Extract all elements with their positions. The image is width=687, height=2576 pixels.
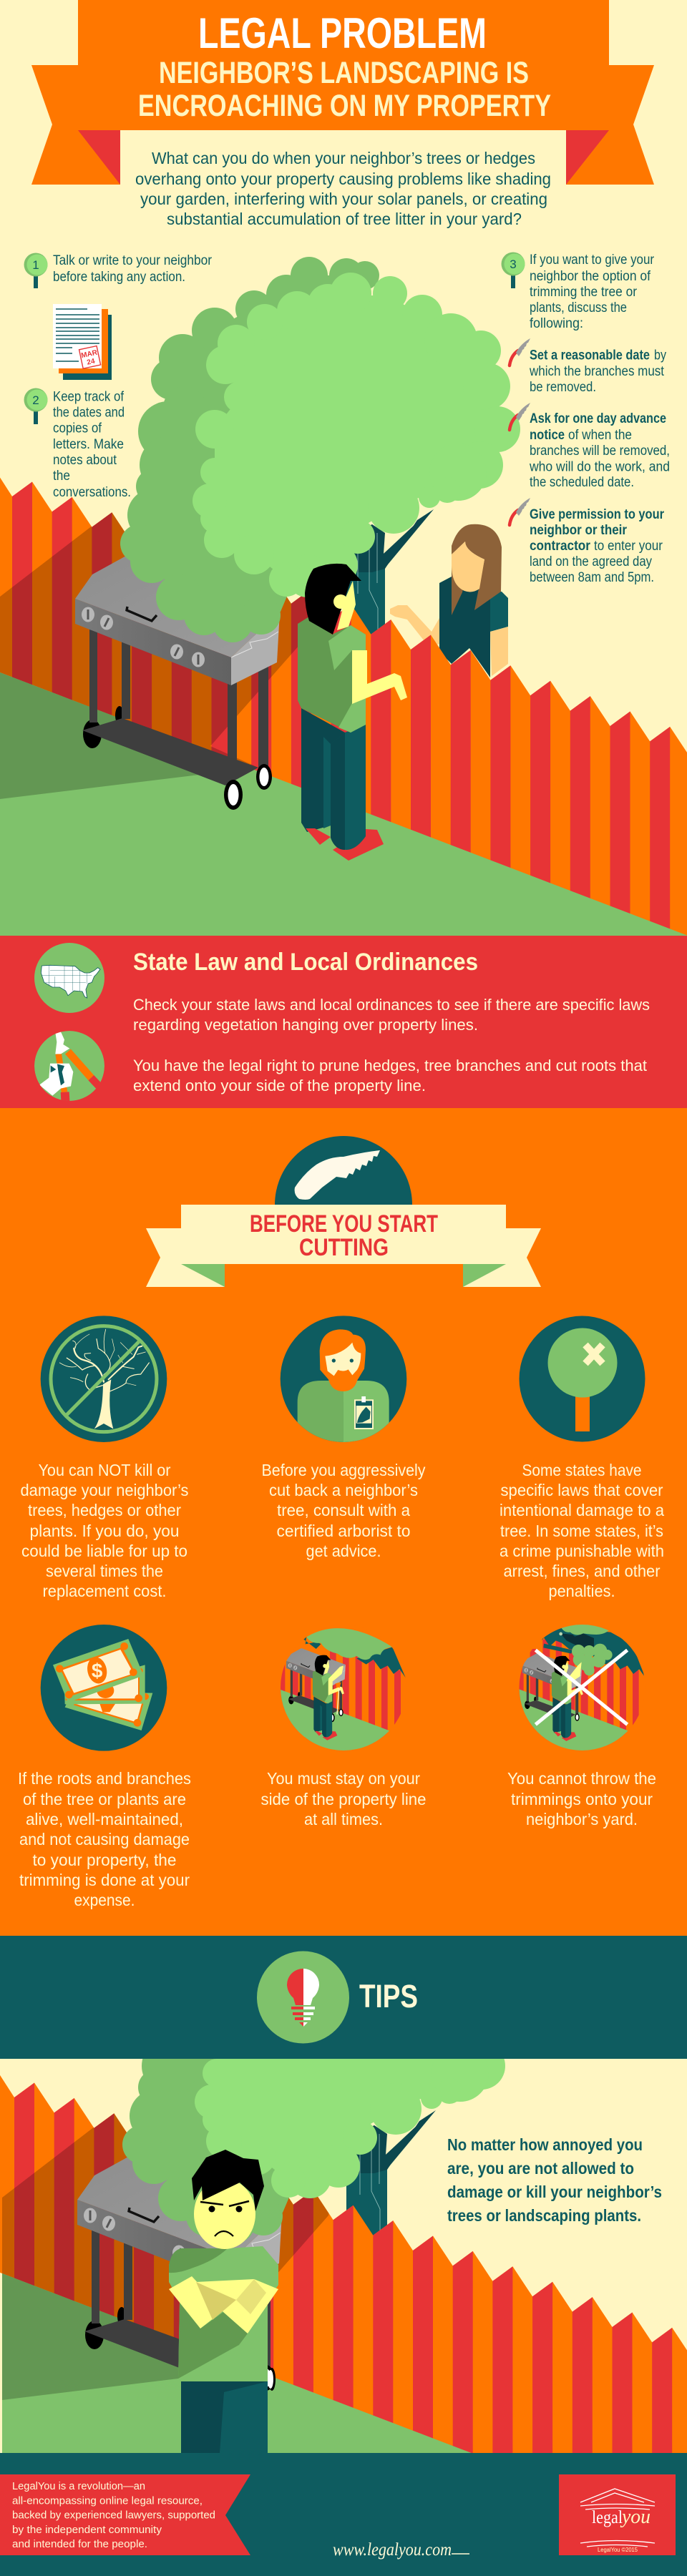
heading ribbon: before you start cutting — [146, 1205, 541, 1287]
text: state laws: a crime punishable with — [500, 1542, 664, 1560]
step 3: neighbor the option of — [530, 269, 651, 284]
logo — [559, 2474, 676, 2555]
text: roots and branches — [18, 1769, 191, 1909]
barbecue grill — [75, 555, 280, 810]
heading: tips: TIPS — [359, 1978, 418, 2014]
step 2: notes about — [53, 453, 117, 468]
logo: you — [620, 2506, 651, 2528]
text: state laws: specific laws that cover — [501, 1481, 663, 1499]
state law body text: extend onto your side of the property line. — [133, 1077, 426, 1094]
text: consult an arborist: Before you aggressively — [262, 1461, 426, 1479]
text: consult an arborist: get advice. — [306, 1542, 381, 1560]
tip text: No matter how annoyed you — [447, 2135, 643, 2154]
tip: one day advance notice: notice — [530, 428, 565, 443]
text: do not throw trimmings: You cannot throw the — [507, 1769, 656, 1788]
step 2: the dates and — [53, 405, 125, 421]
icon: money bills — [41, 1625, 167, 1751]
text: state laws: intentional damage to a — [500, 1501, 664, 1519]
illustration: neighbors at the fence — [0, 257, 687, 937]
text: state laws — [500, 1461, 664, 1600]
state law body text: You have the legal right to prune hedges, tree branches and cut roots that — [133, 1057, 647, 1074]
about flag: and intended for the people. — [12, 2538, 147, 2550]
tip: one day advance notice: the scheduled date. — [530, 475, 634, 490]
overhanging tree — [120, 257, 520, 642]
intro text: your garden, interfering with your solar panels, or creating — [140, 190, 547, 208]
text: consult an arborist: certified arborist to — [276, 1522, 411, 1540]
tip: set a reasonable date: be removed. — [530, 380, 596, 395]
tip text — [447, 2135, 662, 2225]
step 1: before taking any action. — [53, 270, 185, 285]
tip: give permission: land on the agreed day — [530, 554, 652, 569]
text: stay on your side — [260, 1769, 427, 1828]
step 2: the — [53, 469, 70, 484]
tip: one day advance notice: Ask for one day advance — [530, 411, 666, 426]
scene: trunk, fence, lawn, grill and tree — [0, 2059, 687, 2453]
about flag — [0, 2474, 250, 2555]
step 2: Keep track of — [53, 389, 125, 405]
intro text: substantial accumulation of tree litter in your yard? — [167, 210, 522, 228]
text: roots and branches: expense. — [74, 1891, 135, 1909]
state law body text: regarding vegetation hanging over property lines. — [133, 1016, 478, 1034]
panel: tips header — [0, 1936, 687, 2059]
step 1: Talk or write to your neighbor — [53, 253, 213, 268]
tip: one day advance notice: branches will be removed, — [530, 444, 670, 459]
tip: set a reasonable date — [510, 338, 666, 395]
step 2: conversations. — [53, 485, 131, 500]
text: state laws: penalties. — [548, 1582, 615, 1600]
step 1: 1 — [32, 258, 39, 272]
text: state laws: Some states have — [522, 1461, 641, 1479]
tip: give permission: between 8am and 5pm. — [530, 570, 654, 585]
logo: LegalYou ©2015 — [598, 2547, 638, 2553]
subtitle — [138, 56, 551, 123]
icon: US map — [34, 943, 104, 1013]
icon: letters with date stamp: 24 — [86, 358, 96, 367]
step 1 — [24, 253, 213, 288]
text: state laws: tree. In some states, it’s — [500, 1522, 663, 1540]
text: you can not kill: several times the — [46, 1562, 163, 1580]
panel: before you start cutting — [0, 1108, 687, 1936]
text: consult an arborist — [262, 1461, 426, 1560]
icon: man trimming on his side — [281, 1628, 405, 1750]
text: consult an arborist: tree, consult with a — [277, 1501, 410, 1519]
tip: give permission — [510, 498, 665, 585]
icon: money bills: $ — [92, 1660, 103, 1682]
about flag: LegalYou is a revolution—an — [12, 2480, 145, 2492]
text: stay on your side: at all times. — [304, 1810, 383, 1828]
title banner — [31, 0, 654, 185]
text: do not throw trimmings — [507, 1769, 656, 1828]
panel: state law and local ordinances — [0, 936, 687, 1108]
annoyed man — [169, 2150, 278, 2453]
tip: set a reasonable date: which the branches must — [529, 364, 665, 379]
heading ribbon: before you start cutting: CUTTING — [299, 1234, 389, 1261]
fence — [0, 466, 687, 937]
text: you can not kill: damage your neighbor’s — [20, 1481, 189, 1499]
text: you can not kill: trees, hedges or other — [28, 1501, 181, 1519]
step 2: 2 — [32, 393, 39, 407]
logo: legal — [592, 2508, 623, 2527]
tip: set a reasonable date: Set a reasonable date — [530, 348, 650, 363]
man — [298, 564, 407, 861]
lawn and tree shadow — [0, 492, 687, 937]
tip: give permission: contractor — [530, 539, 591, 554]
tip: one day advance notice — [510, 403, 670, 490]
text: roots and branches: of the tree or plants are — [23, 1790, 186, 1808]
step 2: letters. Make — [53, 437, 124, 452]
step 3: plants, discuss the — [530, 300, 627, 315]
intro text — [135, 149, 551, 228]
intro text: What can you do when your neighbor’s trees or hedges — [152, 149, 535, 167]
tip text: trees or landscaping plants. — [447, 2206, 641, 2225]
text: do not throw trimmings: trimmings onto your — [511, 1790, 653, 1808]
text: roots and branches: and not causing damage — [19, 1830, 190, 1848]
text: you can not kill: plants. If you do, you — [30, 1522, 179, 1540]
neighbor woman — [390, 524, 508, 677]
text: you can not kill: replacement cost. — [43, 1582, 166, 1600]
step 3: If you want to give your — [530, 253, 655, 268]
icon: pruning saw — [275, 1136, 412, 1205]
subtitle: ENCROACHING ON MY PROPERTY — [138, 89, 551, 123]
heading ribbon: before you start cutting: BEFORE YOU START — [250, 1210, 438, 1238]
text: stay on your side: You must stay on your — [267, 1769, 420, 1788]
icon: do not throw trimmings — [520, 1625, 644, 1750]
subtitle: NEIGHBOR’S LANDSCAPING IS — [159, 56, 529, 90]
text: state laws: arrest, fines, and other — [504, 1562, 661, 1580]
text: roots and branches: trimming is done at your — [19, 1871, 190, 1889]
about flag: backed by experienced lawyers, supported — [12, 2509, 215, 2522]
text: do not throw trimmings: neighbor’s yard. — [526, 1810, 638, 1828]
icon: light bulb — [257, 1951, 349, 2043]
heading: state law: State Law and Local Ordinances — [133, 949, 478, 976]
step 2: copies of — [53, 421, 102, 436]
icon: arborist — [281, 1316, 406, 1446]
tip text: are, you are not allowed to — [447, 2159, 634, 2178]
step 3 — [501, 252, 655, 331]
tip: one day advance notice: who will do the work, and — [529, 459, 670, 475]
text: roots and branches: alive, well-maintained, — [26, 1810, 183, 1828]
footer — [0, 2453, 687, 2576]
icon: dead tree prohibited — [41, 1316, 167, 1442]
tip: one day advance notice: of when the — [568, 428, 632, 443]
tip: give permission: to enter your — [594, 539, 663, 554]
about flag: all-encompassing online legal resource, — [12, 2495, 203, 2507]
tip text: damage or kill your neighbor’s — [447, 2183, 662, 2201]
intro text: overhang onto your property causing problems like shading — [135, 170, 551, 188]
step 3: 3 — [510, 258, 517, 271]
text: roots and branches: If the roots and branches — [18, 1769, 191, 1788]
icon: letters with date stamp: MAR — [80, 349, 99, 360]
tree trunk — [344, 509, 434, 651]
tip: set a reasonable date: by — [654, 348, 666, 363]
state law body text: Check your state laws and local ordinances to see if there are specific laws — [133, 996, 650, 1014]
about flag: by the independent community — [12, 2524, 162, 2536]
text: you can not kill — [20, 1461, 189, 1600]
icon: tree with x mark — [520, 1316, 645, 1442]
text: stay on your side: side of the property line — [260, 1790, 427, 1808]
text: consult an arborist: cut back a neighbor’s — [269, 1481, 418, 1499]
text: you can not kill: could be liable for up to — [21, 1542, 187, 1560]
step 3: trimming the tree or — [530, 285, 638, 300]
tip: give permission: Give permission to your — [530, 507, 665, 522]
step 2 — [24, 388, 131, 500]
step 3: following: — [530, 316, 583, 331]
text: roots and branches: to your property, the — [33, 1851, 176, 1869]
website url: www.legalyou.com — [333, 2540, 452, 2560]
illustration: annoyed man at the fence — [0, 2059, 687, 2453]
tip: give permission: neighbor or their — [530, 523, 628, 538]
icon: hand with loppers — [34, 1031, 104, 1104]
title: legal problem: LEGAL PROBLEM — [198, 9, 487, 57]
icon: letters with date stamp — [53, 304, 112, 380]
state law body text — [133, 996, 650, 1094]
text: you can not kill: You can NOT kill or — [39, 1461, 171, 1479]
